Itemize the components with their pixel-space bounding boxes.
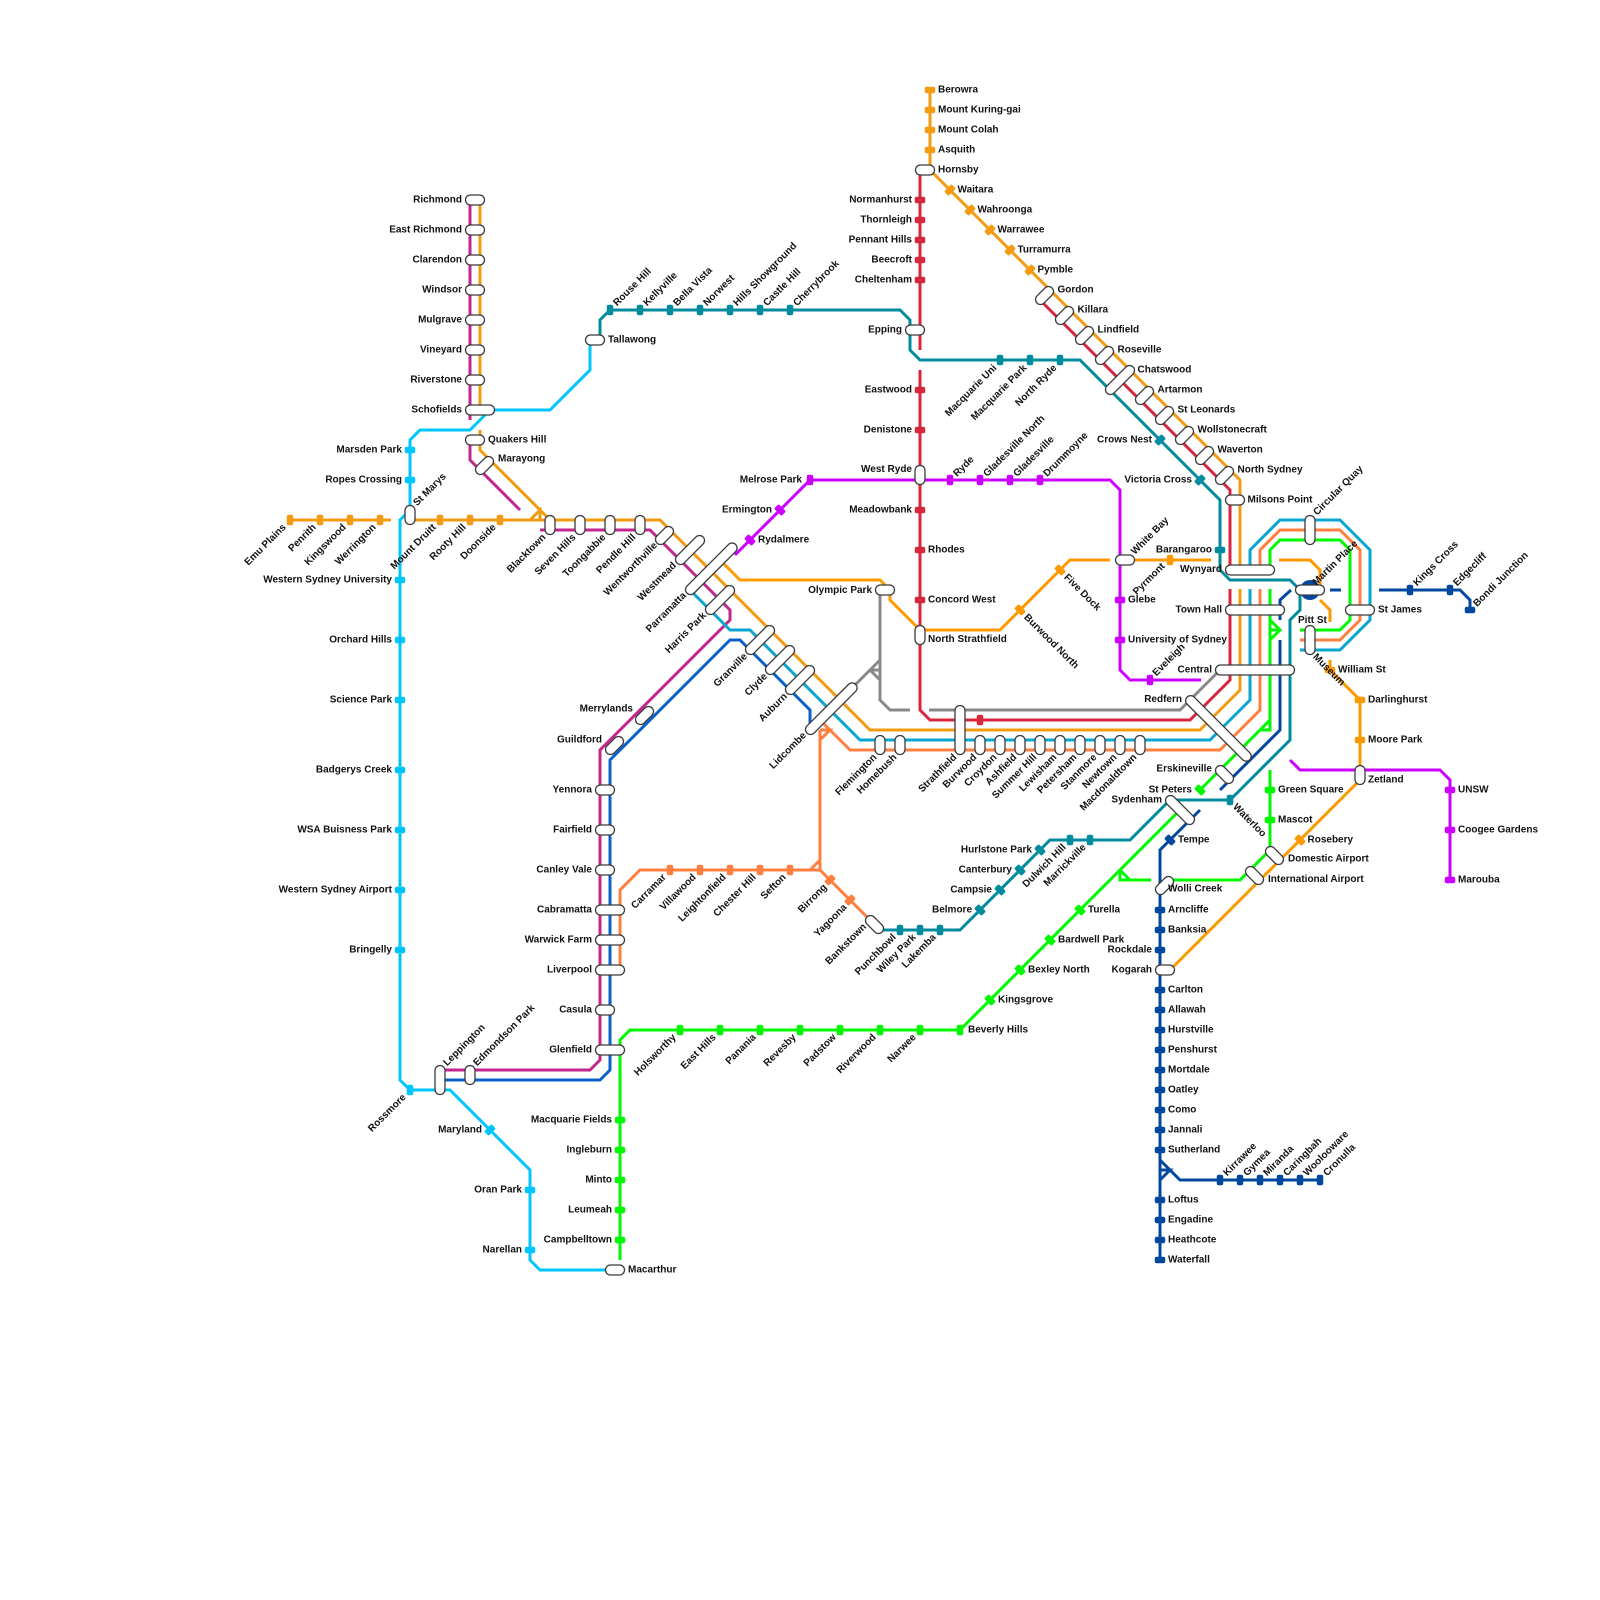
labels: illawarra line: Waterfall <box>1168 1254 1210 1266</box>
labels: city circle: Wynyard <box>1180 564 1222 575</box>
labels: illawarra line: Como <box>1168 1104 1196 1116</box>
labels: city circle: Edgecliff <box>1451 550 1490 589</box>
labels: northern line: Epping <box>868 324 902 336</box>
labels: metro west: White Bay <box>1129 515 1172 557</box>
labels: illawarra line: Wolli Creek <box>1168 884 1223 894</box>
labels: parramatta light rail: Rydalmere <box>758 534 810 546</box>
labels: richmond branch: Riverstone <box>410 374 462 386</box>
station labels <box>243 84 1538 1276</box>
labels: parramatta light rail: Glebe <box>1128 594 1156 606</box>
labels: western line: Granville <box>712 651 750 689</box>
labels: metro west: Five Dock <box>1061 572 1103 614</box>
labels: northern line: West Ryde <box>861 464 912 475</box>
labels: western line: Westmead <box>636 560 679 603</box>
labels: airport and east hills line: Riverwood <box>835 1032 879 1076</box>
icon: Martin Place interchange disc <box>1300 580 1320 600</box>
labels: cumberland line: Merrylands <box>580 704 633 714</box>
labels: north shore: Mount Kuring-gai <box>938 104 1021 116</box>
labels: north shore: St Leonards <box>1178 404 1236 416</box>
labels: western sydney airport line <box>263 444 538 1256</box>
labels: bankstown line: Sefton <box>759 872 789 902</box>
labels: north shore: Hornsby <box>938 164 979 176</box>
labels: northern line: Meadowbank <box>849 504 912 516</box>
labels: metro northwest: Castle Hill <box>761 266 804 309</box>
labels: airport and east hills line: Panania <box>724 1032 759 1067</box>
labels: western line: Kingswood <box>303 522 349 568</box>
labels: south east: Darlinghurst <box>1368 694 1428 706</box>
labels: richmond branch <box>389 194 547 464</box>
labels: south east: Moore Park <box>1368 734 1423 746</box>
labels: city circle: Martin Place <box>1311 538 1360 588</box>
labels: bankstown line: Canterbury <box>959 864 1012 876</box>
labels: metro northwest: North Ryde <box>1013 363 1060 409</box>
labels: metro northwest: Crows Nest <box>1097 434 1153 446</box>
labels: illawarra line <box>1108 834 1358 1266</box>
labels: parramatta light rail: Melrose Park <box>740 474 802 486</box>
labels: western sydney airport line: Orchard Hills <box>329 634 392 646</box>
labels: inner west: Petersham <box>1035 752 1079 796</box>
labels: north shore: Turramurra <box>1018 244 1071 256</box>
line: T2 cyan blue <box>693 520 1370 740</box>
labels: bankstown line: Bankstown <box>823 922 869 967</box>
labels: western sydney airport line: Edmondson Park <box>471 1002 538 1069</box>
labels: south east: International Airport <box>1268 874 1364 885</box>
labels: cumberland line: Glenfield <box>549 1044 592 1056</box>
labels: parramatta light rail: Ermington <box>722 504 772 516</box>
line: Metro West and South East orange <box>720 560 1360 970</box>
labels: northern line: Normanhurst <box>849 194 913 206</box>
labels: parramatta light rail: Ryde <box>951 454 977 479</box>
labels: richmond branch: East Richmond <box>389 224 462 236</box>
labels: western line: Emu Plains <box>243 522 289 568</box>
labels: illawarra line: Oatley <box>1168 1084 1199 1096</box>
labels: airport and east hills line: Macquarie Fields <box>531 1114 612 1126</box>
labels: city circle: St James <box>1378 604 1422 616</box>
labels: bankstown line: Lakemba <box>900 932 939 971</box>
labels: illawarra line: Gymea <box>1241 1147 1273 1179</box>
labels: metro west: Pyrmont <box>1131 561 1168 598</box>
labels: richmond branch: Quakers Hill <box>488 434 547 446</box>
labels: illawarra line: Miranda <box>1261 1143 1297 1179</box>
labels: western line: Lidcombe <box>768 730 809 771</box>
labels: south east: Sydenham <box>1111 794 1162 806</box>
labels: cumberland line: Cabramatta <box>537 904 592 916</box>
labels: western line: Pendle Hill <box>594 532 638 576</box>
labels: richmond branch: Clarendon <box>413 254 462 266</box>
labels: northern line: Thornleigh <box>860 214 912 226</box>
labels: parramatta light rail <box>722 413 1538 886</box>
labels: western line: Harris Park <box>663 610 709 656</box>
labels: airport and east hills line: Leumeah <box>568 1204 612 1216</box>
labels: illawarra line: Kirrawee <box>1221 1141 1259 1179</box>
labels: north shore: Chatswood <box>1138 364 1191 376</box>
labels: north shore: Lindfield <box>1098 324 1139 336</box>
labels: metro northwest: Cherrybrook <box>791 258 842 309</box>
labels: western sydney airport line: Maryland <box>438 1124 482 1136</box>
labels: western line: Wentworthville <box>602 540 660 598</box>
labels: western sydney airport line: Badgerys Creek <box>316 764 392 776</box>
labels: illawarra line: Tempe <box>1178 834 1210 846</box>
labels: airport and east hills line: Bardwell Park <box>1058 934 1125 946</box>
markers: purple light rail stations <box>744 475 1455 883</box>
labels: illawarra line: Rockdale <box>1108 944 1152 956</box>
line: Olympic Park grey <box>855 590 1217 710</box>
labels: airport and east hills line: Bexley North <box>1028 964 1090 976</box>
labels: north shore: North Sydney <box>1238 464 1303 476</box>
labels: airport and east hills line: Turella <box>1088 904 1120 916</box>
labels: south east: William St <box>1338 664 1386 676</box>
labels: north shore: Pymble <box>1038 264 1074 276</box>
labels: metro northwest: Hills Showground <box>731 241 799 309</box>
labels: bankstown line <box>629 842 1089 978</box>
labels: north shore: Waitara <box>958 184 994 196</box>
labels: western line <box>243 471 809 771</box>
labels: cumberland line: Liverpool <box>547 964 592 976</box>
labels: north shore: Waverton <box>1218 444 1263 456</box>
labels: cumberland line <box>525 704 633 1056</box>
labels: airport and east hills line: Padstow <box>802 1032 839 1069</box>
labels: western line: Doonside <box>459 522 499 562</box>
labels: airport and east hills line: Revesby <box>762 1032 799 1069</box>
labels: airport and east hills line: Narwee <box>886 1032 919 1065</box>
line: Metro teal <box>600 310 1300 930</box>
labels: north shore: Milsons Point <box>1248 494 1313 506</box>
labels: northern line: Rhodes <box>928 544 965 556</box>
line: T8 bright green <box>620 540 1350 1260</box>
labels: bankstown line: Hurlstone Park <box>961 844 1032 856</box>
labels: cumberland line: Warwick Farm <box>525 934 592 946</box>
labels: north shore: Gordon <box>1058 284 1094 296</box>
labels: city circle: Bondi Junction <box>1471 550 1531 609</box>
labels: bankstown line: Belmore <box>932 904 972 916</box>
labels: illawarra line: Kogarah <box>1111 964 1152 976</box>
labels: western line: Parramatta <box>644 590 689 635</box>
labels: richmond branch: Marayong <box>498 454 545 464</box>
labels: metro northwest: Norwest <box>701 272 738 309</box>
line: T9 red <box>920 170 1230 720</box>
line: Parramatta light rail purple <box>735 480 1450 880</box>
line: T4 dark blue <box>1160 590 1470 1260</box>
labels: south east: Mascot <box>1278 814 1313 826</box>
labels: cumberland line: Casula <box>559 1004 592 1016</box>
labels: western line: Rooty Hill <box>428 522 469 563</box>
labels: western sydney airport line: Leppington <box>441 1022 488 1069</box>
station markers <box>287 87 1475 1263</box>
labels: inner west: Macdonaldtown <box>1078 752 1139 813</box>
labels: airport and east hills line: Holsworthy <box>632 1032 679 1078</box>
markers: coral T3 stations <box>667 865 856 906</box>
labels: south east: Domestic Airport <box>1288 854 1369 864</box>
labels: bankstown line: Wiley Park <box>875 932 919 976</box>
labels: richmond branch: Vineyard <box>420 344 462 356</box>
labels: northern line: Cheltenham <box>855 274 912 286</box>
labels: metro northwest: Rouse Hill <box>611 266 654 309</box>
labels: inner west <box>833 752 1139 813</box>
labels: bankstown line: Villawood <box>658 872 699 913</box>
line: Western Sydney Airport light cyan <box>400 345 610 1270</box>
labels: metro west <box>1021 515 1172 671</box>
labels: bankstown line: Birrong <box>796 882 829 915</box>
markers: orange metro stations <box>1014 555 1365 846</box>
labels: parramatta light rail: University of Sydney <box>1128 634 1227 646</box>
line: T5 blue <box>440 640 810 1080</box>
labels: parramatta light rail: Drummoyne <box>1041 430 1091 479</box>
labels: bankstown line: Campsie <box>950 884 992 896</box>
labels: north shore: Wollstonecraft <box>1198 424 1267 436</box>
line: T1 North Shore and Western orange <box>290 90 1240 730</box>
labels: parramatta light rail: Gladesville <box>1011 434 1057 479</box>
labels: cumberland line: Yennora <box>553 784 592 796</box>
labels: western sydney airport line: Science Park <box>330 694 392 706</box>
labels: illawarra line: Caringbah <box>1281 1136 1324 1179</box>
labels: city circle: Redfern <box>1144 694 1182 705</box>
labels: richmond branch: Schofields <box>411 404 462 416</box>
labels: city circle <box>1144 463 1531 705</box>
labels: bankstown line: Yagoona <box>812 902 850 939</box>
labels: northern line <box>808 194 1007 645</box>
labels: metro northwest: Macquarie Park <box>969 363 1030 423</box>
labels: north shore: Asquith <box>938 144 975 156</box>
labels: inner west: Newtown <box>1080 752 1119 791</box>
labels: illawarra line: Carlton <box>1168 984 1203 996</box>
labels: western sydney airport line: Rossmore <box>366 1092 409 1134</box>
labels: illawarra line: Arncliffe <box>1168 904 1209 916</box>
labels: western line: St Marys <box>411 471 449 509</box>
labels: parramatta light rail: Coogee Gardens <box>1458 824 1538 836</box>
labels: western line: Seven Hills <box>533 532 579 578</box>
labels: metro northwest: Macquarie Uni <box>943 363 999 419</box>
labels: richmond branch: Mulgrave <box>418 314 462 326</box>
labels: illawarra line: Allawah <box>1168 1004 1206 1016</box>
labels: bankstown line: Marrickville <box>1042 842 1089 889</box>
labels: illawarra line: Woolooware <box>1301 1129 1351 1179</box>
labels: parramatta light rail: Marouba <box>1458 874 1500 886</box>
labels: bankstown line: Leightonfield <box>676 872 729 924</box>
labels: northern line: Pennant Hills <box>849 234 912 246</box>
labels: city circle: Museum <box>1310 652 1347 688</box>
labels: cumberland line: Fairfield <box>553 824 592 836</box>
labels: illawarra line: Mortdale <box>1168 1064 1210 1076</box>
labels: airport and east hills line: Ingleburn <box>566 1144 612 1156</box>
labels: cumberland line: Canley Vale <box>536 864 592 876</box>
labels: metro northwest: Kellyville <box>641 270 680 309</box>
labels: inner west: Summer Hill <box>990 752 1039 801</box>
labels: south east: Erskineville <box>1156 764 1212 774</box>
markers: orange T1 stations <box>287 87 1036 525</box>
labels: illawarra line: Jannali <box>1168 1124 1203 1136</box>
labels: bankstown line: Chester Hill <box>712 872 759 919</box>
markers: dark blue T4 stations <box>1155 585 1475 1263</box>
labels: inner west: Croydon <box>962 752 999 789</box>
labels: south east: Rosebery <box>1308 834 1354 846</box>
labels: south east <box>1111 664 1428 885</box>
route lines <box>290 90 1470 1270</box>
labels: bankstown line: Dulwich Hill <box>1021 842 1069 890</box>
labels: metro northwest: Tallawong <box>608 334 656 346</box>
labels: western sydney airport line: Ropes Crossing <box>325 474 402 486</box>
labels: metro northwest: Barangaroo <box>1156 544 1212 556</box>
labels: inner west: Ashfield <box>984 752 1019 788</box>
labels: north shore <box>938 84 1313 506</box>
labels: western sydney airport line: Western Sydney Airport <box>279 884 393 896</box>
labels: north shore: Killara <box>1078 304 1109 316</box>
labels: western line: Penrith <box>286 522 319 554</box>
labels: richmond branch: Windsor <box>422 284 462 296</box>
labels: inner west: Homebush <box>855 752 899 796</box>
labels: north shore: Berowra <box>938 84 978 96</box>
labels: inner west: Strathfield <box>917 752 959 795</box>
labels: south east: Green Square <box>1278 784 1344 796</box>
labels: parramatta light rail: Gladesville North <box>981 413 1047 479</box>
labels: south east: St Peters <box>1149 784 1192 796</box>
labels: illawarra line: Penshurst <box>1168 1044 1218 1056</box>
labels: western sydney airport line: Bringelly <box>349 944 392 956</box>
labels: western sydney airport line: Narellan <box>483 1244 522 1256</box>
labels: airport and east hills line: Beverly Hills <box>968 1024 1028 1036</box>
labels: airport and east hills line: Campbelltown <box>544 1234 612 1246</box>
line: T3 coral <box>620 530 1360 970</box>
markers: red T9 stations <box>915 197 983 725</box>
labels: airport and east hills line <box>531 904 1125 1276</box>
labels: city circle: Pitt St <box>1298 615 1328 626</box>
labels: western sydney airport line: WSA Buisness Park <box>297 824 392 836</box>
labels: city circle: Town Hall <box>1176 604 1222 616</box>
labels: parramatta light rail: Eveleigh <box>1151 642 1188 679</box>
labels: western line: Auburn <box>757 691 790 724</box>
line: Richmond and Cumberland magenta <box>440 200 730 1070</box>
labels: western line: Blacktown <box>505 532 548 575</box>
labels: north shore: Wahroonga <box>978 204 1033 216</box>
labels: metro northwest: Victoria Cross <box>1124 474 1192 486</box>
labels: north shore: Roseville <box>1118 344 1162 356</box>
labels: inner west: Burwood <box>941 752 979 791</box>
labels: illawarra line: Hurstville <box>1168 1024 1214 1036</box>
labels: northern line: Olympic Park <box>808 585 872 596</box>
labels: richmond branch: Richmond <box>413 194 462 206</box>
labels: northern line: Eastwood <box>865 384 912 396</box>
labels: airport and east hills line: Macarthur <box>628 1264 676 1276</box>
labels: south east: Waterloo <box>1230 802 1268 840</box>
labels: south east: Zetland <box>1368 774 1404 786</box>
labels: inner west: Stanmore <box>1059 752 1100 793</box>
labels: north shore: Warrawee <box>998 224 1045 236</box>
labels: cumberland line: Guildford <box>557 734 602 746</box>
labels: metro northwest: Bella Vista <box>671 265 715 309</box>
interchange pills <box>405 165 1374 1275</box>
labels: illawarra line: Sutherland <box>1168 1144 1220 1156</box>
labels: western sydney airport line: Oran Park <box>474 1184 522 1196</box>
markers: light cyan airport line stations <box>395 447 535 1253</box>
labels: bankstown line: Carramar <box>629 872 669 911</box>
labels: inner west: Lewisham <box>1017 752 1059 794</box>
markers: green T8 stations <box>615 784 1275 1243</box>
labels: airport and east hills line: East Hills <box>679 1032 719 1072</box>
labels: city circle: Central <box>1178 664 1212 676</box>
labels: western line: Werrington <box>333 522 379 567</box>
labels: illawarra line: Heathcote <box>1168 1234 1217 1246</box>
labels: airport and east hills line: Kingsgrove <box>998 994 1053 1006</box>
labels: western line: Clyde <box>743 671 770 698</box>
labels: city circle: Kings Cross <box>1411 539 1461 589</box>
markers: teal metro stations <box>607 305 1233 935</box>
labels: western sydney airport line: Marsden Park <box>336 444 402 456</box>
labels: illawarra line: Banksia <box>1168 924 1207 936</box>
labels: illawarra line: Cronulla <box>1321 1142 1358 1179</box>
labels: western sydney airport line: Western Sydney University <box>263 574 392 586</box>
labels: illawarra line: Loftus <box>1168 1194 1199 1206</box>
labels: metro west: Burwood North <box>1021 612 1081 671</box>
labels: north shore: Mount Colah <box>938 124 999 136</box>
labels: city circle: Circular Quay <box>1311 463 1366 518</box>
labels: parramatta light rail: UNSW <box>1458 784 1489 796</box>
labels: northern line: Denistone <box>864 424 912 436</box>
labels: northern line: North Strathfield <box>928 634 1007 645</box>
labels: airport and east hills line: Minto <box>585 1174 612 1186</box>
labels: western line: Toongabbie <box>561 532 609 579</box>
labels: metro northwest <box>608 241 1212 555</box>
labels: inner west: Flemington <box>833 752 879 798</box>
labels: western line: Mount Druitt <box>389 522 439 572</box>
labels: northern line: Concord West <box>928 594 996 606</box>
labels: north shore: Artarmon <box>1158 384 1203 396</box>
labels: bankstown line: Punchbowl <box>853 932 899 978</box>
labels: illawarra line: Engadine <box>1168 1214 1213 1226</box>
labels: northern line: Beecroft <box>871 254 913 266</box>
